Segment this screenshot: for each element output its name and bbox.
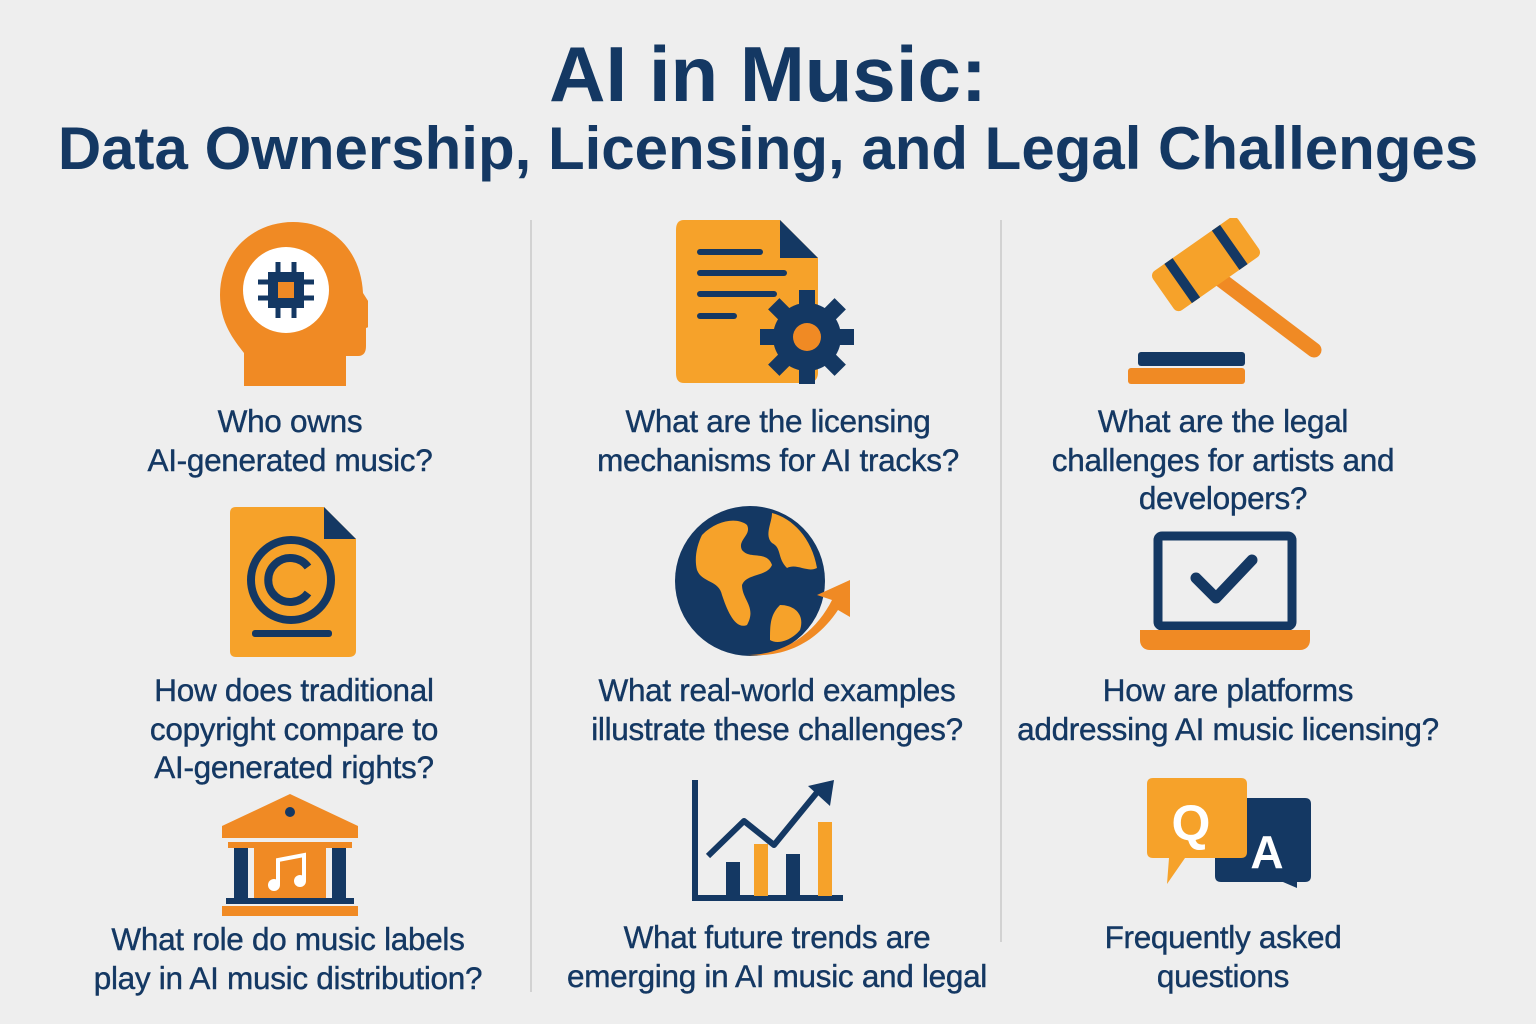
- text: FAQ: Frequently asked: [1105, 919, 1341, 955]
- title: Data Ownership, Licensing, and Legal Challenges: [58, 115, 1478, 182]
- text: who owns: [147, 403, 432, 478]
- text: real-world examples: illustrate these challenges?: [591, 710, 963, 746]
- text: real-world examples: [591, 672, 963, 747]
- text: copyright: [150, 672, 438, 785]
- text: music labels: What role do music labels: [111, 921, 465, 957]
- text: licensing: [597, 403, 959, 478]
- text: platforms: addressing AI music licensing?: [1017, 710, 1439, 746]
- icon: document with gear: [676, 220, 854, 384]
- icon: gavel: [1128, 218, 1322, 384]
- icon: trend chart: [692, 780, 843, 901]
- text: future trends: [567, 919, 987, 994]
- text: copyright: AI-generated rights?: [154, 749, 434, 785]
- text: legal challenges: challenges for artists and: [1052, 442, 1394, 478]
- text: copyright: copyright compare to: [150, 710, 438, 746]
- text: FAQ: questions: [1157, 958, 1289, 994]
- text: platforms: [1017, 672, 1439, 747]
- text: platforms: How are platforms: [1103, 672, 1353, 708]
- icon: Q&A bubbles: Q: [1172, 795, 1210, 851]
- text: future trends: emerging in AI music and legal: [567, 958, 987, 994]
- icon: copyright document: [230, 507, 356, 657]
- text: legal challenges: developers?: [1139, 480, 1307, 516]
- icon: Q&A bubbles: A: [1250, 826, 1284, 878]
- icon: laptop with check: [1140, 532, 1310, 650]
- text: legal challenges: [1052, 403, 1394, 516]
- icon: head with chip: [220, 222, 368, 386]
- text: FAQ: [1105, 919, 1341, 994]
- title: [58, 30, 1478, 182]
- text: music labels: [94, 921, 482, 996]
- text: who owns: Who owns: [218, 403, 362, 439]
- text: copyright: How does traditional: [154, 672, 434, 708]
- icon: globe with arrow: [675, 506, 850, 656]
- text: licensing: mechanisms for AI tracks?: [597, 442, 959, 478]
- text: legal challenges: What are the legal: [1098, 403, 1348, 439]
- text: who owns: AI-generated music?: [148, 442, 432, 478]
- text: licensing: What are the licensing: [625, 403, 931, 439]
- title: AI in Music:: [549, 30, 987, 118]
- text: future trends: What future trends are: [624, 919, 930, 955]
- text: music labels: play in AI music distribution?: [94, 960, 482, 996]
- text: real-world examples: What real-world examples: [599, 672, 955, 708]
- icon: Q&A bubbles: [1147, 778, 1311, 888]
- icon: bank with music note: [222, 794, 358, 916]
